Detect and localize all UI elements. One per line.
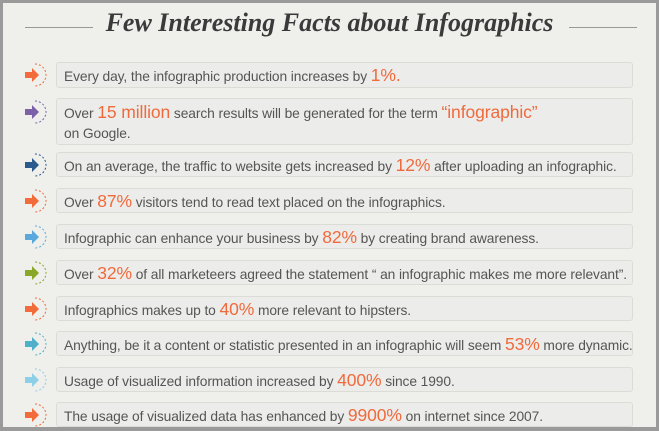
- icon: arrow 3: [25, 154, 46, 176]
- fact 7: [56, 296, 633, 321]
- icon: arrow 9: [25, 368, 46, 392]
- title: Few Interesting Facts about Infographics: [106, 8, 553, 37]
- icon: arrow 2: [25, 100, 46, 124]
- fact 4: Over 87% visitors tend to read text placed on the infographics.: [64, 191, 446, 211]
- fact 2: [56, 98, 633, 145]
- fact 1: [56, 62, 633, 88]
- fact 2: Over 15 million search results will be generated for the term “infographic”: [64, 102, 538, 122]
- fact 6: Over 32% of all marketeers agreed the statement “ an infographic makes me more relevant”.: [64, 263, 627, 283]
- icon: arrow 8: [25, 332, 46, 356]
- icon: arrow 10: [25, 404, 46, 426]
- fact 4: [56, 188, 633, 213]
- icon: arrow 1: [25, 64, 46, 86]
- fact 8: Anything, be it a content or statistic presented in an infographic will seem 53% more dynamic.: [64, 334, 633, 354]
- icon: arrow 4: [25, 190, 46, 212]
- icon: arrow 6: [25, 262, 46, 284]
- fact 10: The usage of visualized data has enhanced by 9900% on internet since 2007.: [64, 405, 543, 425]
- fact 1: Every day, the infographic production increases by 1%.: [64, 65, 401, 85]
- icon: arrow 7: [25, 298, 46, 320]
- fact 5: [56, 224, 633, 249]
- fact 3: On an average, the traffic to website gets increased by 12% after uploading an infographic.: [64, 155, 617, 175]
- fact 5: Infographic can enhance your business by 82% by creating brand awareness.: [64, 227, 539, 247]
- fact 9: Usage of visualized information increased by 400% since 1990.: [64, 370, 455, 390]
- fact 9: [56, 367, 633, 392]
- fact 7: Infographics makes up to 40% more relevant to hipsters.: [64, 299, 411, 319]
- icon: arrow 5: [25, 226, 46, 248]
- fact 10: [56, 402, 633, 427]
- fact 2: on Google.: [64, 126, 131, 141]
